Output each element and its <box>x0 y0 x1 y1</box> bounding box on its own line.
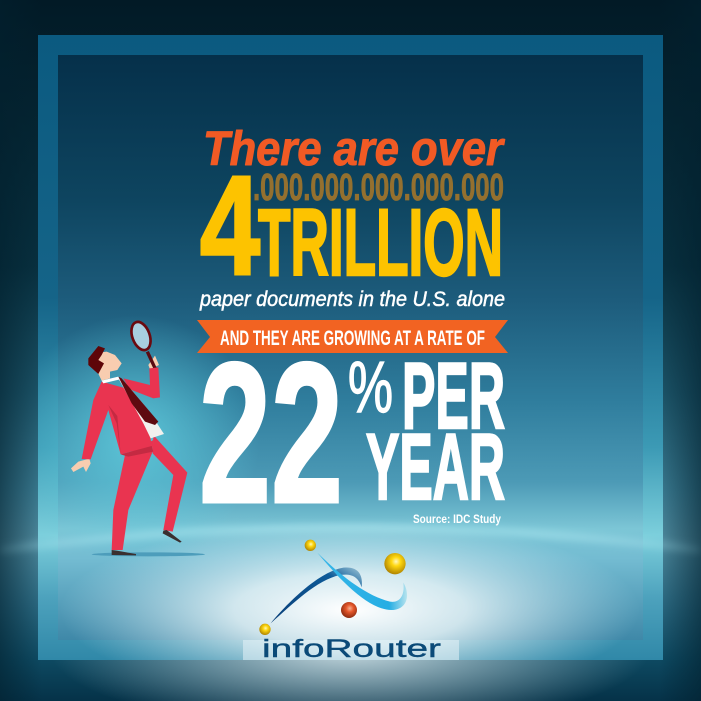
logo mark <box>259 540 407 635</box>
man with magnifying glass <box>71 319 205 556</box>
YEAR: YEAR <box>366 414 505 519</box>
big number 4: 4 <box>200 146 260 304</box>
source note: Source: IDC Study <box>413 512 501 526</box>
big number 22: 22 <box>199 322 343 545</box>
TRILLION: TRILLION <box>258 190 503 296</box>
percent sign: % <box>348 348 393 428</box>
subheading: paper documents: paper documents in the U.S. alone <box>199 288 505 311</box>
heading: There are over: There are over <box>203 123 505 176</box>
logo wordmark: infoRouter <box>262 635 441 663</box>
logo: infoRouter <box>243 540 459 663</box>
zeros line: .000.000.000.000.000 <box>253 167 504 209</box>
PER: PER <box>402 343 505 448</box>
ribbon text: AND THEY ARE GROWING AT A RATE OF <box>220 327 485 350</box>
ribbon banner <box>197 320 508 353</box>
